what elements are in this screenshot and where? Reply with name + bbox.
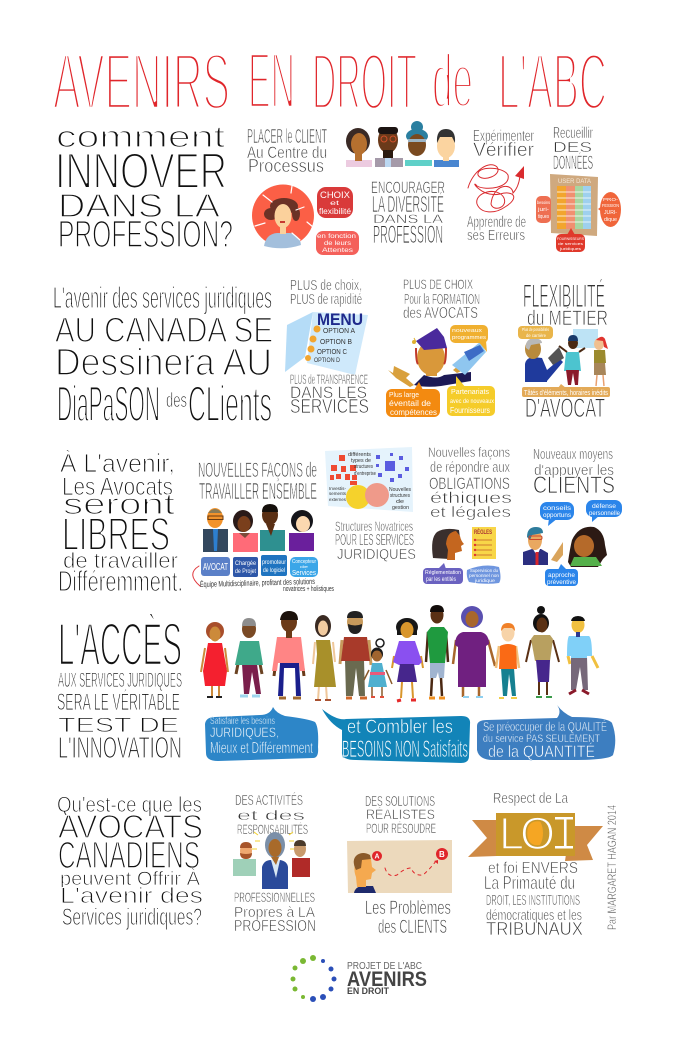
text: professionnelles propres à la profession: Propres à LA <box>234 904 315 921</box>
person 3: pink shirt <box>272 611 305 698</box>
banner: tâches horaires inédits <box>522 384 610 397</box>
callout: choix et flexibilité: flexibilité <box>319 207 352 216</box>
icon: people at work flexibility <box>525 329 608 386</box>
text: des solutions réalistes: POUR RÉSOUDRE <box>366 820 436 836</box>
text: respect de la: Respect de La <box>493 790 569 807</box>
text: PLUS de TRANSPARENCE <box>290 371 368 387</box>
panel: structures diagram: externes <box>329 497 347 502</box>
callout: supervision: Supervision du <box>470 568 498 573</box>
speech bubble: se préoccuper de la qualité <box>477 705 615 761</box>
text: des solutions réalistes: DES SOLUTIONS <box>365 793 435 810</box>
title <box>53 36 607 126</box>
heading: qu'est-ce que les avocats: L'avenir des <box>60 883 203 908</box>
callout: réglementation par les entités: Réglementation <box>425 570 461 576</box>
text: nouvelles façons de répondre <box>428 444 512 521</box>
text: recueillir des données: DES <box>553 139 592 156</box>
heading: comment innover: DANS LA <box>58 187 220 224</box>
callout: approche préventive <box>545 564 578 586</box>
callout: en fonction de leurs attentes <box>316 231 359 255</box>
callout: fournisseurs de services juridiques: FOURNISSEURS <box>557 236 584 241</box>
title: de <box>432 39 473 124</box>
speech bubble: satisfaire les besoins: Satisfaire les besoins <box>210 715 275 727</box>
text: encourager la diversité: ENCOURAGER <box>371 178 445 197</box>
panel: path from a to b <box>347 840 452 893</box>
callout: défense personnelle: défense <box>592 503 616 510</box>
icon: woman profile <box>432 529 464 560</box>
icon: menu: OPTION A <box>323 328 355 335</box>
callout: conseils opportuns <box>540 502 574 526</box>
heading: qu'est-ce que les avocats: AVOCATS <box>58 808 203 845</box>
person 1: red dress <box>201 622 228 697</box>
panel: structures diagram: structures <box>354 464 373 470</box>
text: PLACER le CLIENT <box>247 126 327 148</box>
text: nouveaux moyens d'appuyer: d'appuyer les <box>534 462 614 479</box>
heading: l'avenir des services juridiques: L'avenir des services juridiques <box>53 280 272 315</box>
speech bubble: satisfaire les besoins <box>205 707 318 761</box>
text: PROFESSION <box>373 221 443 249</box>
icon: menu <box>285 310 368 375</box>
heading: qu'est-ce que les avocats: Qu'est-ce que les <box>57 792 202 817</box>
text: plus de choix plus de rapidité: PLUS de choix, <box>290 277 362 294</box>
callout: défense personnelle: personnelle <box>589 510 620 517</box>
text: flexibilité du métier <box>523 278 608 330</box>
callout: nouveaux programmes: nouveaux <box>452 328 482 334</box>
callout: profession juridique: FESSION <box>602 203 619 208</box>
text: apprendre de ses erreurs: Apprendre de <box>467 214 526 231</box>
person 4: olive dress <box>313 615 336 700</box>
speech bubble: satisfaire les besoins: Mieux et Différemment <box>210 740 313 757</box>
callout: supervision: personnel non <box>469 573 500 578</box>
logo: projet de l'abc avenirs en droit: AVENIRS <box>347 968 427 991</box>
text: nouveaux moyens d'appuyer: Nouveaux moyens <box>533 446 613 463</box>
heading: à l'avenir <box>58 448 183 598</box>
text: et foi envers la primauté du droit <box>484 860 583 939</box>
text: expérimenter vérifier: Expérimenter <box>473 128 534 145</box>
callout: partenariats <box>447 376 495 416</box>
text: et foi envers la primauté du droit: La Primauté du <box>484 873 575 893</box>
icon: user data board: USER DATA <box>558 179 591 185</box>
text: équipe multidisciplinaire: novatrices + holistiques <box>283 586 334 593</box>
heading: qu'est-ce que les avocats: peuvent Offrir À <box>60 869 200 890</box>
panel: structures diagram: gestion <box>392 505 409 511</box>
speech bubble: satisfaire les besoins: JURIDIQUES, <box>210 724 279 740</box>
heading: comment innover: comment <box>56 119 226 154</box>
callout: profession juridique: PRO- <box>603 197 619 202</box>
heading: l'avenir des services juridiques <box>53 280 273 432</box>
text: structures novatrices: JURIDIQUES <box>337 546 416 563</box>
callout: fournisseurs de services juridiques <box>556 228 585 252</box>
title: AVENIRS <box>53 37 230 126</box>
labels: team roles: Services <box>292 570 316 577</box>
text: expérimenter vérifier <box>473 128 535 161</box>
text: nouvelles façons de répondre: et légales <box>430 504 511 521</box>
text: NOUVELLES FAÇONS de <box>198 459 317 482</box>
labels: team roles: de Projet <box>235 568 256 575</box>
callout: conseils opportuns: conseils <box>543 505 572 512</box>
panel: structures diagram: d'entreprise <box>354 471 376 477</box>
text: BESOINS NON Satisfaits <box>342 736 468 763</box>
text: structures novatrices <box>335 518 416 563</box>
callout: plus large éventail de compétences: compétences <box>390 408 437 417</box>
text: nouvelles façons de répondre: de répondre aux <box>430 459 510 476</box>
callout: partenariats: Fournisseurs <box>450 406 490 415</box>
speech bubble: se préoccuper de la qualité: Se préoccuper de la QUALITÉ <box>483 719 607 734</box>
labels: team roles: Concepteur <box>292 559 316 565</box>
speech bubble: se préoccuper de la qualité: du service PAS SEULEMENT <box>483 733 600 745</box>
person 6: girl blue dress <box>364 639 392 697</box>
text: structures novatrices: Structures Novatrices <box>335 518 413 534</box>
panel: structures diagram: de <box>396 499 404 505</box>
heading: l'accès: L'INNOVATION <box>58 730 182 765</box>
callout: supervision <box>467 566 500 584</box>
labels: team roles: AVOCAT <box>203 562 228 573</box>
labels: team roles: de <box>300 564 309 569</box>
heading: l'avenir des services juridiques: DiaPaSON <box>57 376 160 432</box>
banner: loi ribbon <box>468 808 603 861</box>
panel: structures diagram: Nouvelles <box>389 487 411 493</box>
heading: qu'est-ce que les avocats <box>57 792 203 931</box>
callout: en fonction de leurs attentes: de leurs <box>324 241 351 247</box>
heading: à l'avenir: LIBRES <box>62 508 170 560</box>
speech bubble: se préoccuper de la qualité: de la QUANTITÉ <box>488 742 595 761</box>
person 11: khaki bun <box>526 606 559 697</box>
heading: l'accès <box>57 611 182 765</box>
heading: qu'est-ce que les avocats: CANADIENS <box>58 835 200 877</box>
text: plus de choix formation: Pour la FORMATION <box>404 291 480 308</box>
heading: comment innover <box>55 119 233 256</box>
heading: comment innover: PROFESSION? <box>58 214 233 256</box>
callout: plus de possibilités de carrière: de carrière <box>526 333 546 338</box>
text: nouvelles façons de répondre: Nouvelles façons <box>428 444 510 460</box>
person 9: purple dress woman <box>453 606 495 697</box>
person 12: blue shirt <box>567 616 598 694</box>
callout: supervision: juridique <box>474 578 496 583</box>
labels: team roles: promoteur <box>262 560 286 566</box>
icon: user data board <box>550 174 598 236</box>
callout: plus large éventail de compétences <box>386 382 440 417</box>
heading: l'avenir des services juridiques: des <box>166 390 187 412</box>
panel: path from a to b: A <box>374 854 380 860</box>
panel: structures diagram: différents <box>348 452 372 458</box>
icon: menu: MENU <box>317 310 363 329</box>
text: TRAVAILLER ENSEMBLE <box>199 478 317 504</box>
text: DONNÉES <box>553 153 593 174</box>
callout: partenariats: avec de nouveaux <box>450 398 495 405</box>
icon: ring of dots <box>290 955 336 1002</box>
text: plus de choix plus de rapidité <box>290 277 362 308</box>
heading: l'avenir des services juridiques: Dessinera AU <box>55 342 272 384</box>
callout: choix et flexibilité: CHOIX <box>320 190 350 200</box>
heading: à l'avenir: Différemment. <box>58 566 183 598</box>
text: AUX SERVICES JURIDIQUES <box>58 669 182 692</box>
heading: à l'avenir: seront <box>63 488 176 521</box>
labels: team roles: de logiciel <box>263 568 285 574</box>
text: nouvelles façons de travailler <box>198 459 317 504</box>
text: expérimenter vérifier: Vérifier <box>473 140 535 161</box>
text: flexibilité du métier: du MÉTIER <box>527 307 608 330</box>
text: des solutions réalistes <box>365 793 436 836</box>
text: plus de choix formation: PLUS DE CHOIX <box>403 276 473 292</box>
text: les problèmes des clients: Les Problèmes <box>365 898 451 919</box>
panel: structures diagram: sements <box>329 491 347 496</box>
text: des activités et des responsabilités: RESPONSABILITÉS <box>237 821 308 837</box>
icon: rules paper <box>472 527 496 559</box>
callout: partenariats: Partenariats <box>451 389 489 396</box>
text: équipe multidisciplinaire <box>200 577 334 593</box>
text: professionnelles propres à la profession: PROFESSION <box>234 918 316 935</box>
text: et foi envers la primauté du droit: DROIT, LES INSTITUTIONS <box>486 892 580 909</box>
callout: plus de possibilités de carrière <box>518 326 553 339</box>
callout: besoins juridiques: juri- <box>537 207 549 213</box>
icon: lawyer with glasses <box>523 527 548 565</box>
text: nouvelles façons de répondre: OBLIGATIONS <box>429 474 510 493</box>
heading: comment innover: INNOVER <box>55 143 227 199</box>
heading: à l'avenir: de travailler <box>63 548 178 573</box>
heading: l'avenir des services juridiques: AU CANADA SE <box>55 311 273 350</box>
person 8: green tall man <box>426 605 448 698</box>
text: L'ACCÈS <box>58 611 182 678</box>
speech bubble: et combler les besoins <box>322 709 470 763</box>
callout: choix et flexibilité <box>317 187 353 218</box>
arrow: red curved <box>193 566 200 586</box>
text: plus de choix formation: des AVOCATS <box>403 305 478 322</box>
text: plus de transparence <box>290 371 369 418</box>
callout: en fonction de leurs attentes: en fonction <box>317 234 356 240</box>
callout: nouveaux programmes <box>450 325 488 352</box>
callout: approche préventive: approche <box>548 572 575 579</box>
heading: à l'avenir: À L'avenir, <box>60 448 175 478</box>
callout: besoins juridiques <box>536 196 551 223</box>
callout: en fonction de leurs attentes: Attentes <box>322 248 353 254</box>
callout: réglementation par les entités <box>423 563 463 584</box>
title: DROIT <box>312 37 417 126</box>
heading: qu'est-ce que les avocats: Services juridiques? <box>62 904 202 931</box>
text: placer le client <box>247 126 327 176</box>
callout: besoins juridiques: besoins <box>537 200 551 205</box>
text: recueillir des données: Recueillir <box>553 125 593 142</box>
panel: structures diagram <box>325 447 413 512</box>
illustration: crowd of twelve people <box>201 605 598 701</box>
person 5: bearded man <box>340 611 371 698</box>
speech bubble: et combler les besoins: et Combler les <box>347 717 453 738</box>
logo: projet de l'abc avenirs en droit <box>290 955 427 1002</box>
panel: structures diagram: structures <box>390 493 410 499</box>
text: professionnelles propres à la profession <box>234 889 316 935</box>
callout: conseils opportuns: opportuns <box>543 512 572 519</box>
text: des activités et des responsabilités: et des <box>237 807 305 823</box>
callout: choix et flexibilité: et <box>330 201 340 207</box>
heading: à l'avenir: Les Avocats <box>62 473 173 501</box>
icon: pointing hand <box>551 542 563 562</box>
callout: profession juridique: JURI- <box>604 210 617 216</box>
text: placer le client: Processus <box>248 156 324 176</box>
callout: profession juridique <box>598 192 621 227</box>
text: POUR LES SERVICES <box>335 532 414 549</box>
labels: team roles: Chargée <box>235 560 256 567</box>
icon: three professionals <box>233 832 310 889</box>
text: équipe multidisciplinaire: Équipe Multidisciplinaire, profitant des solutions <box>200 577 315 589</box>
text: des activités et des responsabilités <box>235 792 308 837</box>
icon: four professionals <box>203 504 314 552</box>
panel: structures diagram: Investis- <box>329 486 346 491</box>
logo: projet de l'abc avenirs en droit: EN DROIT <box>347 986 389 997</box>
text: et foi envers la primauté du droit: et foi ENVERS <box>488 860 578 877</box>
callout: plus large éventail de compétences: éventail de <box>389 399 432 408</box>
icon: four faces <box>346 121 459 167</box>
text: nouvelles façons de répondre: éthiques <box>430 490 512 507</box>
panel: structures diagram: types de <box>351 458 371 464</box>
text: les problèmes des clients <box>365 898 451 938</box>
banner: loi ribbon: LOI <box>499 808 572 859</box>
heading: l'accès: TEST DE <box>58 714 179 737</box>
icon: client at center circle <box>252 184 314 248</box>
icon: rules paper: RÈGLES <box>474 528 492 536</box>
text: nouveaux moyens d'appuyer <box>533 446 615 499</box>
callout: plus de possibilités de carrière: Plus de possibilités <box>522 327 550 332</box>
callout: plus large éventail de compétences: Plus large <box>389 392 419 399</box>
icon: graduate with laptop <box>388 328 486 387</box>
text: des solutions réalistes: RÉALISTES <box>366 806 435 822</box>
title: EN <box>248 36 295 125</box>
callout: réglementation par les entités: par les entités <box>426 577 456 583</box>
callout: besoins juridiques: tiques <box>538 214 549 220</box>
text: placer le client: Au Centre du <box>247 143 327 162</box>
labels: team roles <box>201 555 318 577</box>
icon: menu: OPTION C <box>317 349 347 356</box>
text: professionnelles propres à la profession: PROFESSIONNELLES <box>234 889 315 905</box>
text: recueillir des données <box>553 125 593 174</box>
text: encourager la diversité <box>371 178 445 249</box>
banner: tâches horaires inédits: Tâtés d'éléments, horaires inédits <box>524 388 608 397</box>
callout: approche préventive: préventive <box>547 579 576 586</box>
icon: menu: OPTION B <box>320 339 352 346</box>
text: encourager la diversité: DANS LA <box>373 212 443 226</box>
text: et foi envers la primauté du droit: démocratiques et les <box>486 907 582 924</box>
text: des activités et des responsabilités: DES ACTIVITÉS <box>235 792 303 809</box>
text: nouveaux moyens d'appuyer: CLIENTS <box>533 472 615 499</box>
text: apprendre de ses erreurs: ses Erreurs <box>467 227 525 244</box>
callout: défense personnelle <box>586 500 622 522</box>
heading: l'avenir des services juridiques: CLients <box>188 376 272 432</box>
text: et foi envers la primauté du droit: TRIBUNAUX <box>486 919 583 939</box>
text: plus de transparence: SERVICES <box>290 396 369 418</box>
callout: profession juridique: dique <box>604 217 617 223</box>
text: signature rotated: Par MARGARET HAGAN 2014 <box>605 805 619 930</box>
text: apprendre de ses erreurs <box>467 214 526 244</box>
panel: path from a to b: B <box>439 850 445 859</box>
callout: fournisseurs de services juridiques: juridiques <box>559 246 581 251</box>
text: plus de transparence: DANS LES <box>290 383 367 402</box>
person 7: purple top <box>392 618 423 701</box>
text: plus de choix plus de rapidité: PLUS de rapidité <box>290 291 362 308</box>
icon: menu: OPTION D <box>314 358 341 364</box>
icon: tangled red scribble arrow <box>468 165 524 212</box>
callout: fournisseurs de services juridiques: de services <box>558 241 583 246</box>
text: LA DIVERSITÉ <box>372 191 444 217</box>
text: plus de choix formation <box>403 276 480 322</box>
person 2: green shirt <box>235 618 263 696</box>
person 10: orange boy <box>496 623 519 698</box>
icon: woman with curly hair <box>568 527 607 567</box>
callout: nouveaux programmes: programmes <box>452 335 486 341</box>
heading: l'accès: SERA LE VÉRITABLE <box>57 689 180 716</box>
text: d'avocat: D'AVOCAT <box>525 393 605 423</box>
logo: projet de l'abc avenirs en droit: PROJET DE L'ABC <box>347 960 422 972</box>
text: les problèmes des clients: des CLIENTS <box>378 917 447 938</box>
